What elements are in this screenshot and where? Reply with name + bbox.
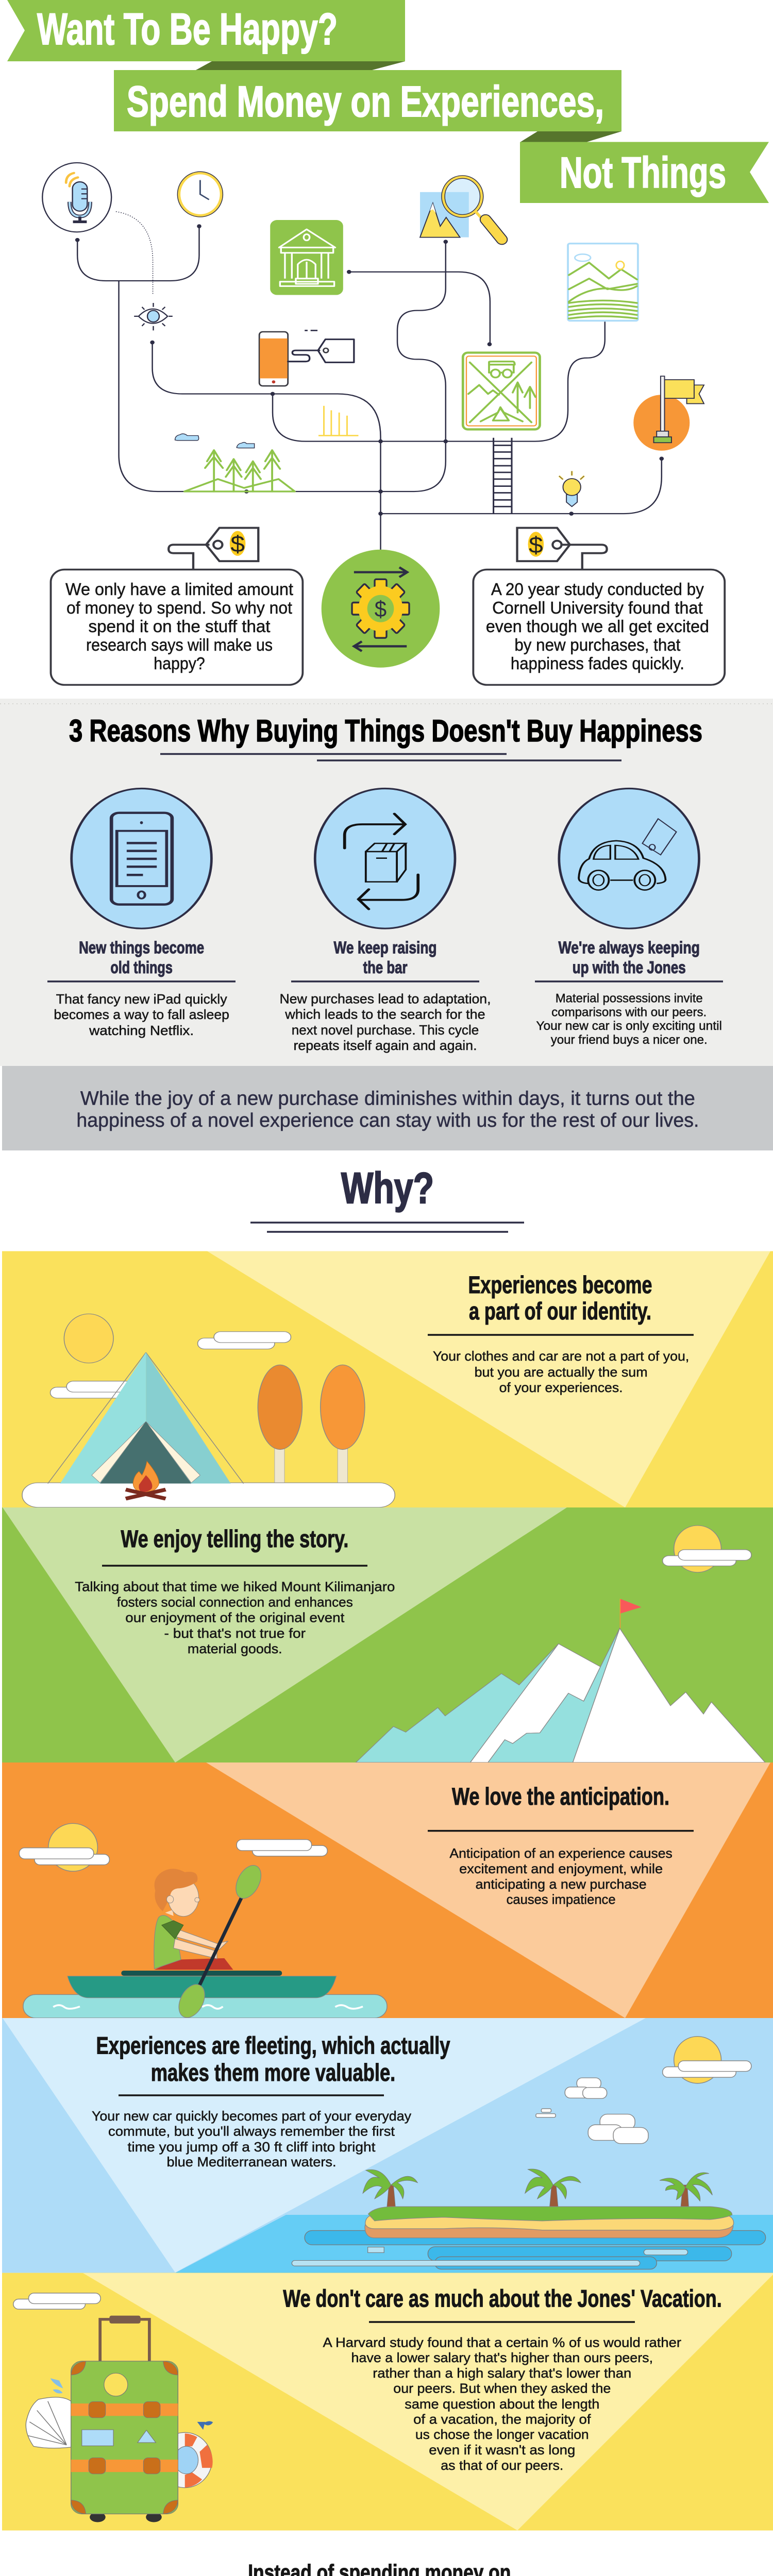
heading: why: Why?	[341, 1164, 434, 1212]
panel: Jones vacation	[2, 2273, 773, 2531]
text block: Cornell study: Cornell University found that	[492, 598, 703, 617]
panel: anticipation	[2, 1762, 773, 2021]
heading and text: story	[75, 1525, 395, 1656]
price tag left	[169, 528, 258, 569]
reason 2 text: next novel purchase. This cycle	[292, 1022, 479, 1038]
icon: microphone	[42, 163, 111, 232]
connector lines	[77, 212, 662, 550]
icon: money gear circle	[322, 550, 440, 668]
reason 2 text: repeats itself again and again.	[294, 1038, 477, 1053]
reason 2 text: which leads to the search for the	[284, 1007, 485, 1022]
heading and text: story: Talking about that time we hiked Mount Kilimanjaro	[75, 1579, 395, 1595]
text block: limited money: We only have a limited amount	[65, 580, 293, 599]
panel: takeaway band	[2, 1066, 773, 1150]
illustration: suitcase	[13, 2293, 213, 2522]
heading and text: anticipation: anticipating a new purchase	[476, 1876, 647, 1892]
title ribbon line 2	[114, 70, 621, 131]
heading and text: Jones vacation: us chose the longer vacation	[415, 2427, 589, 2442]
title ribbon line 1	[7, 0, 405, 61]
panel: 3 reasons	[0, 699, 773, 1066]
icon: forest hills	[175, 434, 295, 492]
network illustration	[42, 163, 725, 685]
reason 1 text: New things become	[79, 938, 204, 957]
reason 2 text: New purchases lead to adaptation,	[279, 991, 491, 1007]
text block: limited money	[65, 580, 293, 673]
callout box left	[51, 569, 303, 685]
heading and text: fleeting: time you jump off a 30 ft cliff into bright	[128, 2139, 376, 2155]
heading and text: fleeting: Experiences are fleeting, which actually	[96, 2032, 450, 2059]
reason 3 text: comparisons with our peers.	[551, 1006, 707, 1019]
heading and text: story: material goods.	[188, 1641, 282, 1656]
heading and text: anticipation: causes impatience	[507, 1892, 616, 1907]
reason 2 text: the bar	[363, 958, 408, 977]
panel: takeaway band: happiness of a novel experience can stay with us for the rest of our lives.	[76, 1110, 699, 1131]
reason 3 text: We're always keeping	[558, 938, 700, 957]
heading and text: fleeting: blue Mediterranean waters.	[167, 2154, 336, 2170]
heading and text: story: We enjoy telling the story.	[121, 1525, 348, 1552]
heading and text: identity	[428, 1271, 694, 1395]
panel: fleeting	[2, 2018, 773, 2273]
heading and text: Jones vacation: A Harvard study found that a certain % of us would rather	[323, 2334, 681, 2350]
illustration: kayaker	[19, 1823, 387, 2021]
reason 2 text: We keep raising	[334, 938, 437, 957]
reason 3 text: Your new car is only exciting until	[536, 1019, 722, 1033]
heading and text: identity: a part of our identity.	[469, 1297, 651, 1325]
icon: money gear circle: $	[375, 597, 387, 622]
heading and text: story: our enjoyment of the original event	[125, 1610, 345, 1625]
title ribbon line 2: Spend Money on Experiences,	[127, 77, 604, 126]
panel: identity	[2, 1251, 773, 1507]
connector dots	[75, 224, 664, 516]
text block: limited money: spend it on the stuff that	[89, 617, 270, 636]
price tag left: $	[230, 531, 245, 557]
heading and text: anticipation: excitement and enjoyment, while	[459, 1861, 663, 1876]
reason 1 text: watching Netflix.	[89, 1023, 194, 1038]
text block: Cornell study: happiness fades quickly.	[511, 654, 684, 673]
heading and text: anticipation	[428, 1783, 694, 1907]
heading and text: fleeting: makes them more valuable.	[151, 2059, 395, 2086]
text block: Cornell study	[486, 580, 709, 673]
icon: car circle	[559, 788, 699, 928]
heading and text: Jones vacation: as that of our peers.	[441, 2458, 563, 2473]
price tag right	[517, 528, 607, 569]
illustration: camping tent	[22, 1314, 395, 1507]
icon: bank	[270, 220, 343, 295]
text block: Cornell study: A 20 year study conducted by	[491, 580, 704, 599]
illustration: island	[292, 2037, 766, 2269]
icon: clock	[177, 172, 223, 217]
callout box right	[473, 569, 725, 685]
text block: limited money: research says will make us	[86, 635, 273, 654]
title ribbon line 1: Want To Be Happy?	[37, 5, 338, 54]
heading and text: Jones vacation: of a vacation, the majority of	[413, 2411, 591, 2427]
heading and text: Jones vacation: our peers. But when they asked the	[393, 2381, 611, 2396]
heading and text: Jones vacation: rather than a high salary that's lower than	[373, 2365, 631, 2381]
illustration: mountain with flag	[356, 1526, 765, 1762]
heading and text: anticipation: Anticipation of an experience causes	[449, 1845, 673, 1861]
reason 3 text: your friend buys a nicer one.	[551, 1033, 708, 1047]
heading and text: Jones vacation	[283, 2285, 722, 2473]
icon: landscape picture	[568, 244, 638, 320]
reason 2 text	[279, 938, 491, 1053]
title ribbon: shadow folds	[196, 61, 621, 142]
icon: bar lines	[318, 406, 358, 435]
heading: why	[250, 1164, 524, 1232]
reason 1 text: old things	[110, 958, 173, 977]
text block: Cornell study: even though we all get excited	[486, 617, 709, 636]
icon: cycle box circle	[315, 788, 455, 928]
heading and text: fleeting: Your new car quickly becomes part of your everyday	[92, 2108, 411, 2124]
reason 1 text: That fancy new iPad quickly	[56, 991, 227, 1007]
icon: magnifier over mountain	[420, 177, 502, 240]
reason 1 text: becomes a way to fall asleep	[54, 1007, 229, 1022]
heading and text: identity: Experiences become	[468, 1271, 652, 1298]
heading and text: story: - but that's not true for	[164, 1625, 306, 1641]
heading and text: fleeting: commute, but you'll always remember the first	[108, 2124, 395, 2139]
heading and text: Jones vacation: have a lower salary that's higher than ours peers,	[351, 2350, 653, 2365]
reason 3 text: Material possessions invite	[556, 992, 703, 1006]
heading and text: Jones vacation: even if it wasn't as long	[429, 2442, 575, 2458]
heading and text: story: fosters social connection and enhances	[117, 1595, 353, 1610]
text block: limited money: of money to spend. So why not	[66, 598, 292, 617]
panel: story	[2, 1507, 773, 1762]
icon: eye	[134, 303, 173, 330]
reason 1 text	[47, 938, 236, 1038]
icon: flag on orange circle	[633, 376, 704, 451]
reason 3 text	[535, 938, 723, 1047]
heading and text: Jones vacation: same question about the length	[405, 2396, 599, 2412]
title ribbon line 3	[520, 142, 769, 203]
icon: camping badge	[463, 352, 540, 429]
icon: ladder	[494, 438, 512, 514]
icon: tablet circle	[72, 788, 211, 928]
panel: header and spending network	[7, 0, 769, 685]
price tag right: $	[529, 532, 543, 558]
icon: phone with price tag	[259, 330, 354, 386]
heading and text: identity: but you are actually the sum	[475, 1364, 648, 1380]
text block: Cornell study: by new purchases, that	[514, 635, 680, 654]
heading and text: fleeting	[92, 2032, 450, 2170]
icons row	[72, 788, 699, 928]
heading and text: identity: Your clothes and car are not a part of you,	[433, 1348, 689, 1364]
panel: takeaway band: While the joy of a new purchase diminishes within days, it turns out the	[80, 1088, 695, 1110]
icon: light bulb	[559, 471, 584, 506]
reason 3 text: up with the Jones	[573, 958, 686, 977]
text block: limited money: happy?	[154, 654, 205, 673]
heading and text: identity: of your experiences.	[499, 1380, 623, 1395]
heading and text: anticipation: We love the anticipation.	[452, 1783, 669, 1810]
